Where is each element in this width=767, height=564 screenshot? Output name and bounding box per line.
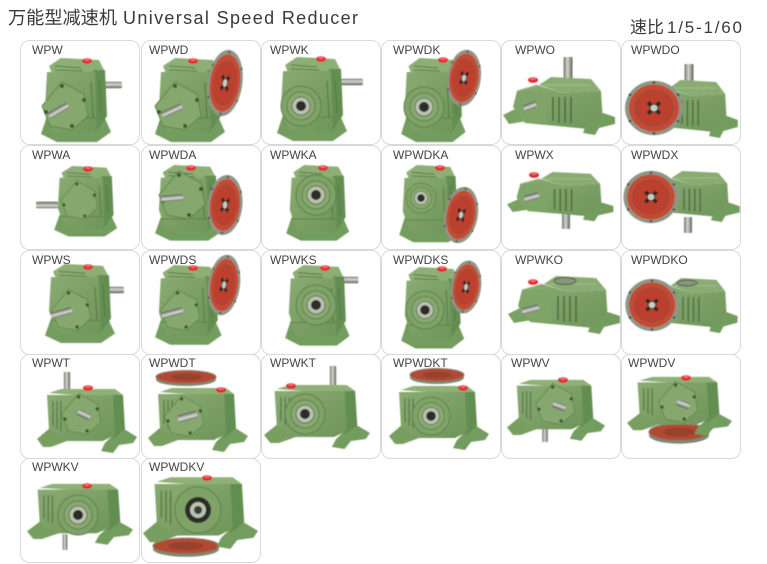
icon: WPWDKT reducer xyxy=(389,368,489,450)
label: WPW: WPW xyxy=(32,43,63,57)
label: WPWDA: WPWDA xyxy=(149,148,196,162)
label: WPWKV: WPWKV xyxy=(32,460,79,474)
panel: WPWDKA xyxy=(382,146,500,250)
panel: WPWDKT xyxy=(382,354,500,458)
icon: WPWDO reducer xyxy=(625,64,738,138)
label: WPWX: WPWX xyxy=(515,148,554,162)
icon: WPWDX reducer xyxy=(623,171,740,233)
panel: WPWDX xyxy=(622,146,740,250)
panel: WPWK xyxy=(262,40,380,144)
title: 万能型减速机 xyxy=(8,8,117,28)
icon: WPWT reducer xyxy=(37,372,137,453)
icon: WPWO reducer xyxy=(503,57,615,135)
label: WPWD: WPWD xyxy=(149,43,189,57)
label: WPWDK: WPWDK xyxy=(393,43,440,57)
label: WPWDKS: WPWDKS xyxy=(393,253,448,267)
panel: WPWT xyxy=(20,354,140,458)
icon: WPWD reducer xyxy=(155,48,247,142)
icon: WPWKS reducer xyxy=(285,265,358,346)
panel: WPWDK xyxy=(382,40,500,144)
icon: WPWA reducer xyxy=(36,166,117,237)
panel: WPWKT xyxy=(262,354,380,458)
panel: WPWDS xyxy=(142,250,260,354)
icon: WPWV reducer xyxy=(507,377,605,442)
label: WPWDS: WPWDS xyxy=(149,253,196,267)
label: WPWA: WPWA xyxy=(32,148,70,162)
panel: WPWDKV xyxy=(142,458,260,562)
icon: WPWS reducer xyxy=(45,264,124,343)
panel: WPWX xyxy=(502,146,620,250)
panel: WPWDO xyxy=(622,40,740,144)
label: WPWK: WPWK xyxy=(270,43,309,57)
panel: WPWKA xyxy=(262,146,380,250)
panel: WPWDT xyxy=(142,354,260,458)
icon: WPWDA reducer xyxy=(155,165,245,241)
icon: WPWDKA reducer xyxy=(399,165,482,246)
label: WPWDKT: WPWDKT xyxy=(393,356,448,370)
icon: WPWDKO reducer xyxy=(625,278,738,333)
title: Universal Speed Reducer xyxy=(123,8,358,28)
icon: WPWDV reducer xyxy=(627,375,732,444)
icon: WPWDKV reducer xyxy=(143,475,258,557)
icon: WPWDKS reducer xyxy=(401,258,485,348)
panel: WPWKV xyxy=(20,458,140,562)
label: WPWO: WPWO xyxy=(515,43,555,57)
icon: WPWKO reducer xyxy=(508,276,620,334)
label: WPWDV: WPWDV xyxy=(628,356,675,370)
label: WPWDKV: WPWDKV xyxy=(149,460,204,474)
panel: WPWDKO xyxy=(622,250,740,354)
label: WPWDT: WPWDT xyxy=(149,356,196,370)
icon: WPWDK reducer xyxy=(401,48,485,142)
panel: WPWDA xyxy=(142,146,260,250)
label: WPWV: WPWV xyxy=(511,356,550,370)
speed ratio note: 1/5-1/60 xyxy=(667,18,742,37)
panel: WPWKO xyxy=(502,250,620,354)
label: WPWDX: WPWDX xyxy=(631,148,678,162)
panel: WPWKS xyxy=(262,250,380,354)
label: WPWKA: WPWKA xyxy=(270,148,317,162)
panel: WPWO xyxy=(502,40,620,144)
panel: WPWDV xyxy=(622,354,740,458)
panel: WPWS xyxy=(20,250,140,354)
icon: WPW reducer xyxy=(41,58,122,142)
icon: WPWX reducer xyxy=(507,172,613,229)
panel: WPW xyxy=(20,40,140,144)
icon: WPWDT reducer xyxy=(148,370,248,452)
label: WPWDKO: WPWDKO xyxy=(631,253,688,267)
label: WPWT: WPWT xyxy=(32,356,71,370)
icon: WPWKV reducer xyxy=(27,483,133,550)
icon: WPWKT reducer xyxy=(264,366,370,449)
panel: WPWV xyxy=(502,354,620,458)
label: WPWDKA: WPWDKA xyxy=(393,148,448,162)
panel: WPWA xyxy=(20,146,140,250)
icon: WPWKA reducer xyxy=(286,165,349,241)
panel: WPWD xyxy=(142,40,260,144)
panel: WPWDKS xyxy=(382,250,500,354)
label: WPWKS: WPWKS xyxy=(270,253,317,267)
label: WPWKO: WPWKO xyxy=(515,253,563,267)
icon: WPWDS reducer xyxy=(155,253,244,345)
label: WPWS: WPWS xyxy=(32,253,71,267)
icon: WPWK reducer xyxy=(277,56,363,141)
label: WPWKT: WPWKT xyxy=(270,356,317,370)
speed ratio note: 速比 xyxy=(630,18,664,37)
label: WPWDO: WPWDO xyxy=(631,43,680,57)
